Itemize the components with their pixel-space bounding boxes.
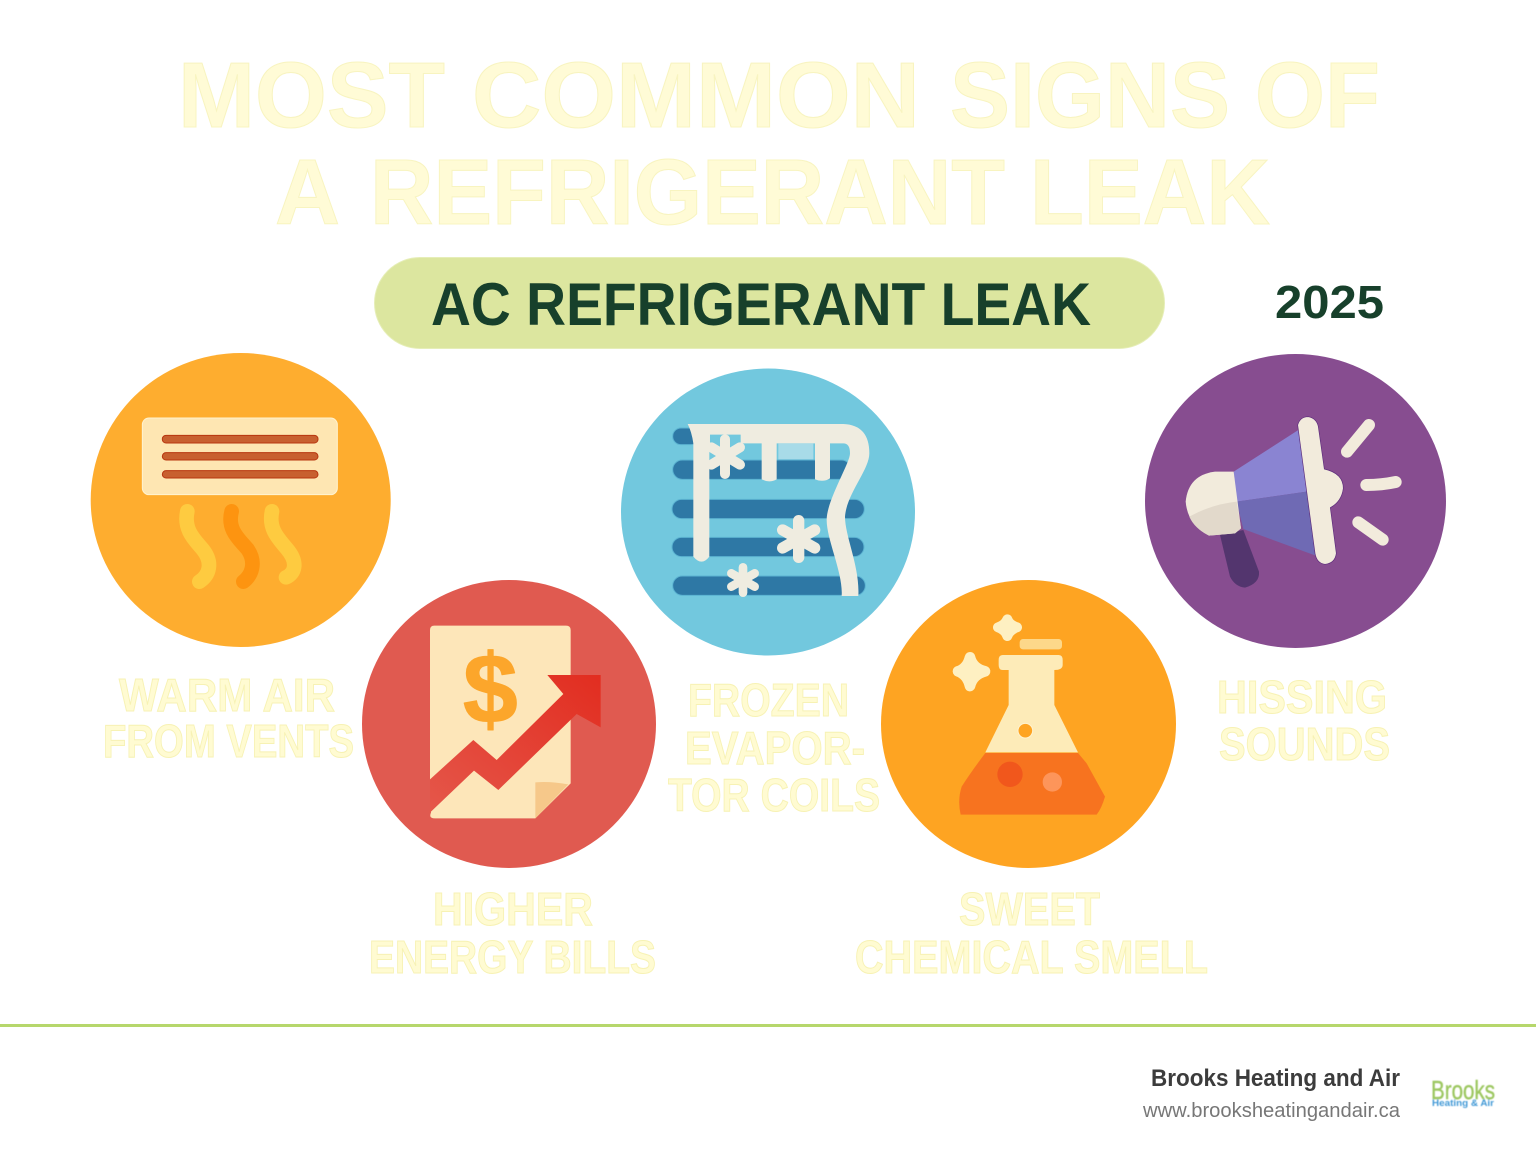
icon: bill with dollar sign and rising arrow xyxy=(430,626,601,818)
label: warm air from vents: WARM AIR xyxy=(119,669,335,721)
label: frozen evaporator coils: TOR COILS xyxy=(668,769,880,821)
panel: frozen evaporator coils xyxy=(621,368,915,656)
footer: company name and website: Brooks Heating and Air xyxy=(1151,1065,1400,1092)
footer: company name and website: www.brooksheatingandair.ca xyxy=(1142,1100,1401,1122)
logo: Brooks: Heating & Air xyxy=(1432,1098,1495,1108)
year: 2025 xyxy=(1275,276,1384,328)
label: frozen evaporator coils: FROZEN xyxy=(688,674,849,726)
label: warm air from vents: FROM VENTS xyxy=(103,715,354,767)
title: COMMON xyxy=(472,43,920,147)
footer: company name and website xyxy=(1142,1065,1401,1122)
label: higher energy bills: HIGHER xyxy=(433,883,593,935)
panel: warm air from vents xyxy=(91,353,391,647)
label: hissing sounds xyxy=(1217,671,1390,770)
icon: bill with dollar sign and rising arrow: $ xyxy=(463,634,518,744)
icon: flask with sparkles xyxy=(958,619,1105,815)
label: sweet chemical smell xyxy=(855,883,1208,983)
label: sweet chemical smell: CHEMICAL SMELL xyxy=(855,931,1208,983)
label: frozen evaporator coils xyxy=(668,674,880,821)
title: A xyxy=(275,140,340,244)
panel: higher energy bills xyxy=(362,580,656,868)
icon: frosted coil xyxy=(672,424,869,596)
title: REFRIGERANT xyxy=(370,140,1005,244)
label: frozen evaporator coils: EVAPOR- xyxy=(685,722,865,774)
label: sweet chemical smell: SWEET xyxy=(959,883,1100,935)
title: SIGNS xyxy=(950,43,1230,147)
label: hissing sounds: SOUNDS xyxy=(1219,718,1390,770)
label: higher energy bills xyxy=(369,883,656,983)
title: LEAK xyxy=(1030,140,1270,244)
heading pill: AC refrigerant leak xyxy=(374,258,1164,348)
label: higher energy bills: ENERGY BILLS xyxy=(369,931,656,983)
icon: air vent with heat waves xyxy=(142,418,337,582)
title: MOST xyxy=(178,43,445,147)
title: OF xyxy=(1255,43,1380,147)
panel: hissing sounds xyxy=(1145,354,1446,648)
icon: megaphone xyxy=(1186,417,1396,588)
logo: Brooks: Brooks xyxy=(1431,1075,1495,1105)
title xyxy=(178,43,1380,244)
label: hissing sounds: HISSING xyxy=(1217,671,1387,723)
heading pill: AC refrigerant leak: AC REFRIGERANT LEAK xyxy=(431,271,1091,338)
panel: sweet chemical smell xyxy=(881,580,1176,868)
label: warm air from vents xyxy=(103,669,354,767)
